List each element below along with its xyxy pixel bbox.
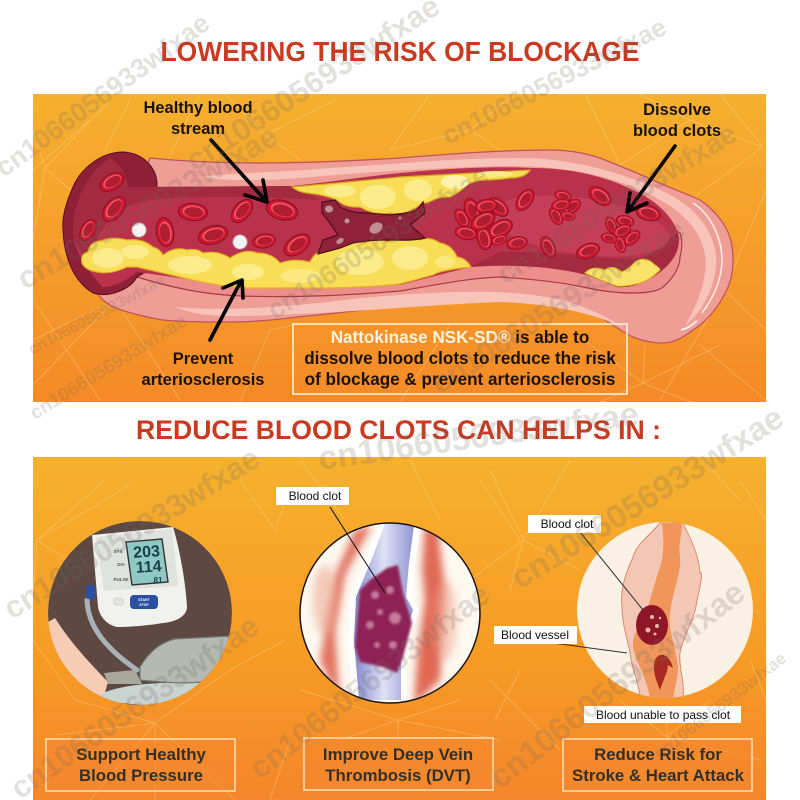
- blood clot cluster target: [600, 214, 643, 254]
- circle illustration: stroke and blocked vessel: [577, 522, 753, 700]
- label: dissolve blood clots: blood clots: [633, 122, 721, 140]
- blood clot cluster small: [546, 189, 584, 227]
- artery wall highlights: [175, 158, 722, 330]
- title: lowering the risk of blockage: LOWERING THE RISK OF BLOCKAGE: [160, 36, 640, 67]
- blood pressure monitor: 81: [154, 576, 163, 585]
- lower plaque: [82, 237, 471, 288]
- leader line: blood clot: [330, 507, 385, 593]
- caption: support healthy blood pressure: Blood Pressure: [79, 766, 203, 785]
- callout: nattokinase: of blockage & prevent arteriosclerosis: [305, 370, 615, 389]
- tag: blood clot: [276, 487, 349, 505]
- watermarks: cn1066056933wfxae: [425, 211, 691, 401]
- vessel lumen: [73, 158, 679, 287]
- caption: improve deep vein thrombosis: Thrombosis (DVT): [325, 766, 471, 785]
- caption: improve deep vein thrombosis: Improve Deep Vein: [323, 745, 473, 764]
- artery outer wall: [97, 150, 733, 343]
- blood clot: [355, 565, 412, 673]
- clot: [318, 200, 425, 254]
- callout: nattokinase: dissolve blood clots to reduce the risk: [304, 349, 616, 368]
- caption: reduce risk for stroke and heart attack: Reduce Risk for: [594, 745, 722, 764]
- blood pressure monitor: [92, 527, 187, 627]
- watermarks: cn1066056933wfxae: [11, 118, 284, 296]
- label: healthy blood stream: stream: [171, 120, 225, 138]
- blood clot cluster large: [452, 194, 516, 251]
- watermarks: cn1066056933wfxae: [262, 160, 494, 325]
- blood pressure monitor: SYS: [113, 549, 123, 554]
- callout: nattokinase: Nattokinase NSK-SD® is able to: [331, 328, 589, 347]
- blood pressure monitor: PULSE: [113, 577, 129, 582]
- blood pressure monitor: 114: [135, 558, 162, 577]
- blood pressure monitor: STOP: [139, 603, 149, 607]
- label: prevent arteriosclerosis: arteriosclerosis: [142, 371, 264, 389]
- white blood cells: [132, 223, 247, 249]
- label: prevent arteriosclerosis: Prevent: [173, 350, 234, 368]
- caption: support healthy blood pressure: [46, 739, 235, 791]
- callout: nattokinase: [293, 324, 627, 394]
- tag: blood vessel: [494, 626, 577, 644]
- watermarks: cn1066056933wfxae: [437, 11, 671, 150]
- tag: blood clot: Blood clot: [541, 517, 594, 531]
- blood pressure monitor: 203: [133, 543, 161, 562]
- red blood cells: [76, 169, 662, 262]
- arrow: prevent arteriosclerosis: [210, 280, 243, 340]
- watermarks: cn1066056933wfxae: [651, 649, 790, 763]
- leader line: blood vessel: [553, 643, 627, 653]
- panel: benefits: [33, 457, 766, 800]
- caption: reduce risk for stroke and heart attack: Stroke & Heart Attack: [572, 766, 745, 785]
- watermarks: cn1066056933wfxae: [482, 573, 752, 796]
- caption: support healthy blood pressure: Support Healthy: [76, 745, 206, 764]
- blood pressure monitor: START: [138, 598, 151, 602]
- watermarks: cn1066056933wfxae: [0, 440, 266, 626]
- blood clot: [636, 605, 668, 645]
- watermarks: cn1066056933wfxae: [243, 576, 497, 786]
- title: reduce blood clots: REDUCE BLOOD CLOTS CAN HELPS IN :: [136, 415, 661, 445]
- tag: blood clot: Blood clot: [289, 489, 342, 503]
- panel: artery illustration: [33, 94, 766, 402]
- watermarks: cn1066056933wfxae: [504, 398, 790, 596]
- tag: blood clot: [528, 515, 601, 533]
- label: healthy blood stream: Healthy blood: [143, 99, 253, 117]
- arrow: healthy blood stream: [211, 140, 267, 202]
- tag: blood vessel: Blood vessel: [501, 628, 569, 642]
- watermarks: cn1066056933wfxae: [492, 118, 743, 291]
- blood pressure monitor: DIA: [117, 562, 126, 567]
- vessel opening rim: [63, 152, 160, 295]
- caption: reduce risk for stroke and heart attack: [563, 739, 752, 791]
- arrow: dissolve blood clots: [627, 146, 675, 212]
- watermarks: cn1066056933wfxae: [26, 272, 168, 359]
- circle photo: blood pressure monitor: [40, 521, 232, 710]
- watermarks: cn1066056933wfxae: [316, 395, 641, 478]
- caption: improve deep vein thrombosis: [304, 738, 493, 790]
- inner tube wall: [137, 180, 682, 297]
- watermarks: cn1066056933wfxae: [27, 311, 191, 424]
- lumen shading: [73, 158, 679, 287]
- small plaque: [585, 259, 660, 286]
- circle illustration: deep vein thrombosis: [300, 523, 480, 705]
- upper plaque: [292, 170, 530, 214]
- leader line: blood clot: [580, 532, 643, 610]
- watermarks: cn1066056933wfxae: [4, 608, 265, 800]
- tag: blood unable to pass clot: Blood unable to pass clot: [596, 708, 731, 722]
- label: dissolve blood clots: Dissolve: [643, 101, 711, 119]
